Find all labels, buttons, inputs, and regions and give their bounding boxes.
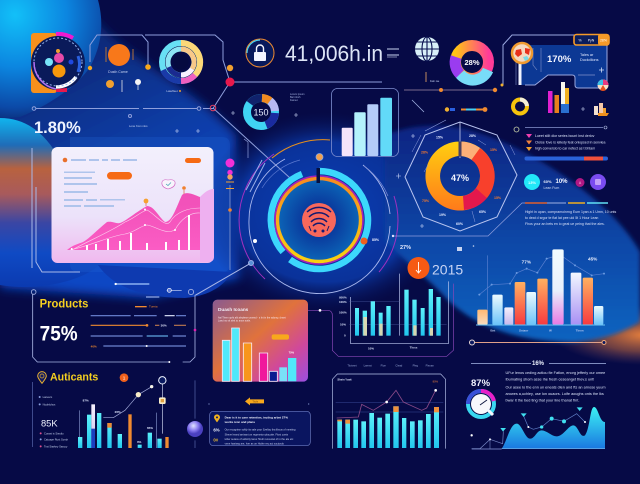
top right bar chart: Sstaor xyxy=(519,328,529,332)
top right bar chart xyxy=(476,249,605,332)
lock icon xyxy=(246,39,274,67)
octagon donut: 19% xyxy=(439,213,447,217)
right list block: high conversio to car nefect as t bhtam xyxy=(535,146,595,150)
right list block: Lueet stIIt dior series bount Inst derlov xyxy=(535,134,595,138)
top right bar chart: 45% xyxy=(588,257,598,262)
top right panel: 28% xyxy=(600,38,607,42)
donut 28%: 28% xyxy=(464,58,480,67)
top right bar chart: W xyxy=(549,328,552,332)
top right panel: PyN xyxy=(588,38,595,42)
mid bottom bar chart: 10% xyxy=(368,347,374,351)
right stats row xyxy=(524,174,606,190)
top right bar chart: Bnt xyxy=(490,328,495,332)
blob: left orange xyxy=(0,118,100,287)
panel: products: Products xyxy=(40,297,89,311)
connector lines xyxy=(32,35,382,178)
octagon donut: 28% xyxy=(469,134,477,138)
octagon donut: 60% xyxy=(456,222,464,226)
panel: products: Tuerta xyxy=(149,305,158,309)
orange circle icon: Dusth Carne xyxy=(108,70,128,74)
mid bottom bar chart xyxy=(307,274,453,367)
sphere xyxy=(187,421,203,437)
paragraph block: UFur lenos ceding actlou fie Fatlon, enorg jefferly our omee xyxy=(506,371,605,375)
donut 28% xyxy=(455,46,488,80)
mid bottom bar chart: Fleoan xyxy=(426,363,434,367)
slider xyxy=(470,340,606,345)
pin icon xyxy=(38,372,46,383)
stack icon xyxy=(594,103,609,116)
panel: dush icons: 75% xyxy=(289,351,295,355)
panel: dush icons: Aal Tlrem upht alit aleplese usnesd - s Int in the adomy, dnset xyxy=(218,316,286,319)
small mid-top connector row xyxy=(404,72,497,112)
paragraph block: Ibumating shom asse Ihe fresh ceseanget thev.s unt! xyxy=(506,378,594,382)
mid bottom bar chart: 950% xyxy=(339,295,347,299)
panel: callout: Dear is it to care retention, inctlog arbet 27% xyxy=(225,415,288,419)
yellow ring xyxy=(513,99,527,114)
right lower 16% heading: 16% xyxy=(532,361,545,367)
label 27% and badge xyxy=(400,245,474,251)
caption left: Lone from nlos xyxy=(129,124,148,128)
lollipop icon xyxy=(512,43,532,85)
panel: products xyxy=(31,264,250,363)
top right panel: % xyxy=(578,38,582,42)
panel: callout: Our recognise softly its sale your Szellac tha libsus of meeting xyxy=(225,428,296,432)
octagon donut: 28% xyxy=(421,150,429,154)
lower bar and line chart xyxy=(332,374,446,449)
panel: products: 30% xyxy=(161,324,167,328)
right list block xyxy=(514,126,608,160)
panel: auticants: 1 xyxy=(123,375,126,380)
ring donut xyxy=(162,43,200,93)
top right panel xyxy=(500,34,609,88)
mid bottom bar chart: 10% xyxy=(340,322,346,326)
donut 150: 150 xyxy=(253,108,269,118)
blob: top left xyxy=(0,0,101,118)
panel: auticants: Auticants xyxy=(50,372,98,384)
right stats row: 10% xyxy=(556,179,568,185)
2015 badge: 2015 xyxy=(432,262,463,278)
right-of-card vertical track xyxy=(226,158,234,270)
mid bottom bar chart: Pleg xyxy=(413,363,419,367)
panel: dush icons: Laed no sit sleit to anon sotle. xyxy=(218,320,251,323)
right stats row: A xyxy=(579,181,582,185)
right text block: to deat d srgor te flat lat pee uld 5t 1 Hour Lean xyxy=(525,216,598,220)
small bar trio xyxy=(548,82,569,113)
panel: callout xyxy=(208,397,310,446)
right stats row: 13% xyxy=(528,180,536,185)
center gauge xyxy=(239,140,398,294)
paragraph block: bwar it the bed ting that your line thanat fInt. xyxy=(506,398,579,402)
panel: auticants: 26% xyxy=(115,410,121,414)
right list block: Cloise fove is ielledy feat onlopsed in senviea xyxy=(535,140,605,144)
mid bottom bar chart: 100% xyxy=(339,310,347,314)
octagon donut: 47% xyxy=(451,173,469,183)
2015 badge xyxy=(408,257,463,279)
panel: auticants: Laneum xyxy=(43,395,53,399)
panel: auticants: Catoape Rust Sondr xyxy=(44,437,68,441)
right stats row: 60% xyxy=(544,179,552,184)
panel: callout: works icon and plans xyxy=(224,420,255,424)
mid bottom bar chart: Tloisnet xyxy=(347,363,357,367)
mid bars frame xyxy=(332,88,398,156)
lower bar and line chart: 80% xyxy=(433,380,439,384)
panel: dush icons xyxy=(213,300,308,382)
percent label: 1.80% xyxy=(34,119,81,137)
donut 150 xyxy=(247,98,275,126)
panel: callout: Thole xyxy=(252,401,259,403)
panel: products: 40% xyxy=(91,344,97,348)
orange circle icon xyxy=(106,44,141,92)
center gauge: 85% xyxy=(372,238,380,242)
chart badge xyxy=(162,180,175,189)
right text block xyxy=(394,203,616,236)
paragraph block xyxy=(506,371,606,402)
small mid-top connector row: Fatn rae xyxy=(430,80,440,83)
octagon donut: 15% xyxy=(436,136,444,140)
panel: auticants: Curant is Steutlo xyxy=(44,431,64,435)
top right panel: 170% xyxy=(547,54,572,65)
mid bottom bar chart: Clead xyxy=(395,363,403,367)
right text block: Hight in upan, compramoinrng Eum 1yan a 1 Umn, 10 unts xyxy=(525,210,616,214)
mid bottom bar chart: Laenst xyxy=(364,363,372,367)
panel: dush icons: Duash Icoans xyxy=(218,307,249,312)
label 27% and badge: 27% xyxy=(400,245,411,251)
faint text near donut 150 xyxy=(290,93,304,102)
mid bottom bar chart: 100% xyxy=(339,300,347,304)
panel: auticants: 0% xyxy=(137,440,142,444)
faint text near donut 150: Fasnet xyxy=(290,99,298,102)
octagon donut xyxy=(405,120,517,231)
small stars xyxy=(175,107,585,228)
paragraph block: arowes a,uchley, use lon ouaors. Loife aoughs onts the lks xyxy=(506,392,604,396)
octagon donut: 15% xyxy=(494,196,502,200)
panel: callout: 6% xyxy=(213,428,220,433)
panel: callout: Sheve heard arrizant on regeneton placoite. Flost coets xyxy=(225,432,289,436)
faint text near donut 150: Bal mbsh xyxy=(290,96,301,99)
top right panel: Tales ar xyxy=(580,53,594,57)
left brackets xyxy=(32,148,80,272)
top right bar chart: Tleon xyxy=(576,328,584,332)
top right panel: Duckdlions xyxy=(580,58,599,62)
87% gauge xyxy=(468,378,494,417)
octagon donut: 65% xyxy=(479,210,487,214)
87% gauge: 87% xyxy=(471,378,491,389)
lower right area chart xyxy=(470,407,605,449)
faint text near donut 150: Lorem ipsum xyxy=(290,93,304,96)
right text block: Fhos your an bets en io geat ue peing that the ales. xyxy=(525,222,605,226)
headline number: 41,006h.in xyxy=(285,41,383,66)
panel: callout: vene hasiseg are, Iver as on Hothe rey act sociceds xyxy=(225,442,285,446)
mid bottom bar chart: Tloss xyxy=(410,346,418,350)
octagon donut: 15% xyxy=(490,148,498,152)
top right bar chart: 77% xyxy=(522,260,532,265)
panel: callout: tolter serace of adiority lares Houh reccestet of in the ale etc xyxy=(225,437,294,441)
globe icon xyxy=(415,37,439,61)
connector: center to products xyxy=(196,260,254,295)
mid bottom bar chart: 0 xyxy=(344,334,346,338)
top left radial widget xyxy=(31,33,85,93)
panel: white dashboard card xyxy=(52,147,214,263)
headline dash marks xyxy=(387,49,399,57)
right lower 16% heading xyxy=(471,361,606,367)
lower bar and line chart: Shein Yoait xyxy=(337,378,352,382)
panel: auticants: 65% xyxy=(147,426,153,430)
octagon donut: 75% xyxy=(422,199,430,203)
right stats row: Lean Fum xyxy=(544,186,559,190)
panel: products: 75% xyxy=(40,322,78,346)
panel: auticants: Nodelohos xyxy=(43,402,56,406)
panel: auticants xyxy=(32,372,195,448)
ring donut: Lateflset xyxy=(166,89,178,93)
panel: callout: 0# xyxy=(213,437,219,442)
panel: auticants: 87% xyxy=(83,398,89,402)
paragraph block: Our asee lo the enn un eneats dlen and fts an arnose yuum xyxy=(506,386,606,390)
panel: auticants: Trat Starkey Sarcoy xyxy=(44,444,68,448)
mid bottom bar chart: Floe xyxy=(381,363,386,367)
connector nodes xyxy=(88,64,234,111)
top right mini pie xyxy=(598,80,608,91)
panel: auticants: 85K xyxy=(41,418,58,428)
pink area chart xyxy=(67,193,200,250)
cyan ring arcs xyxy=(271,171,368,269)
